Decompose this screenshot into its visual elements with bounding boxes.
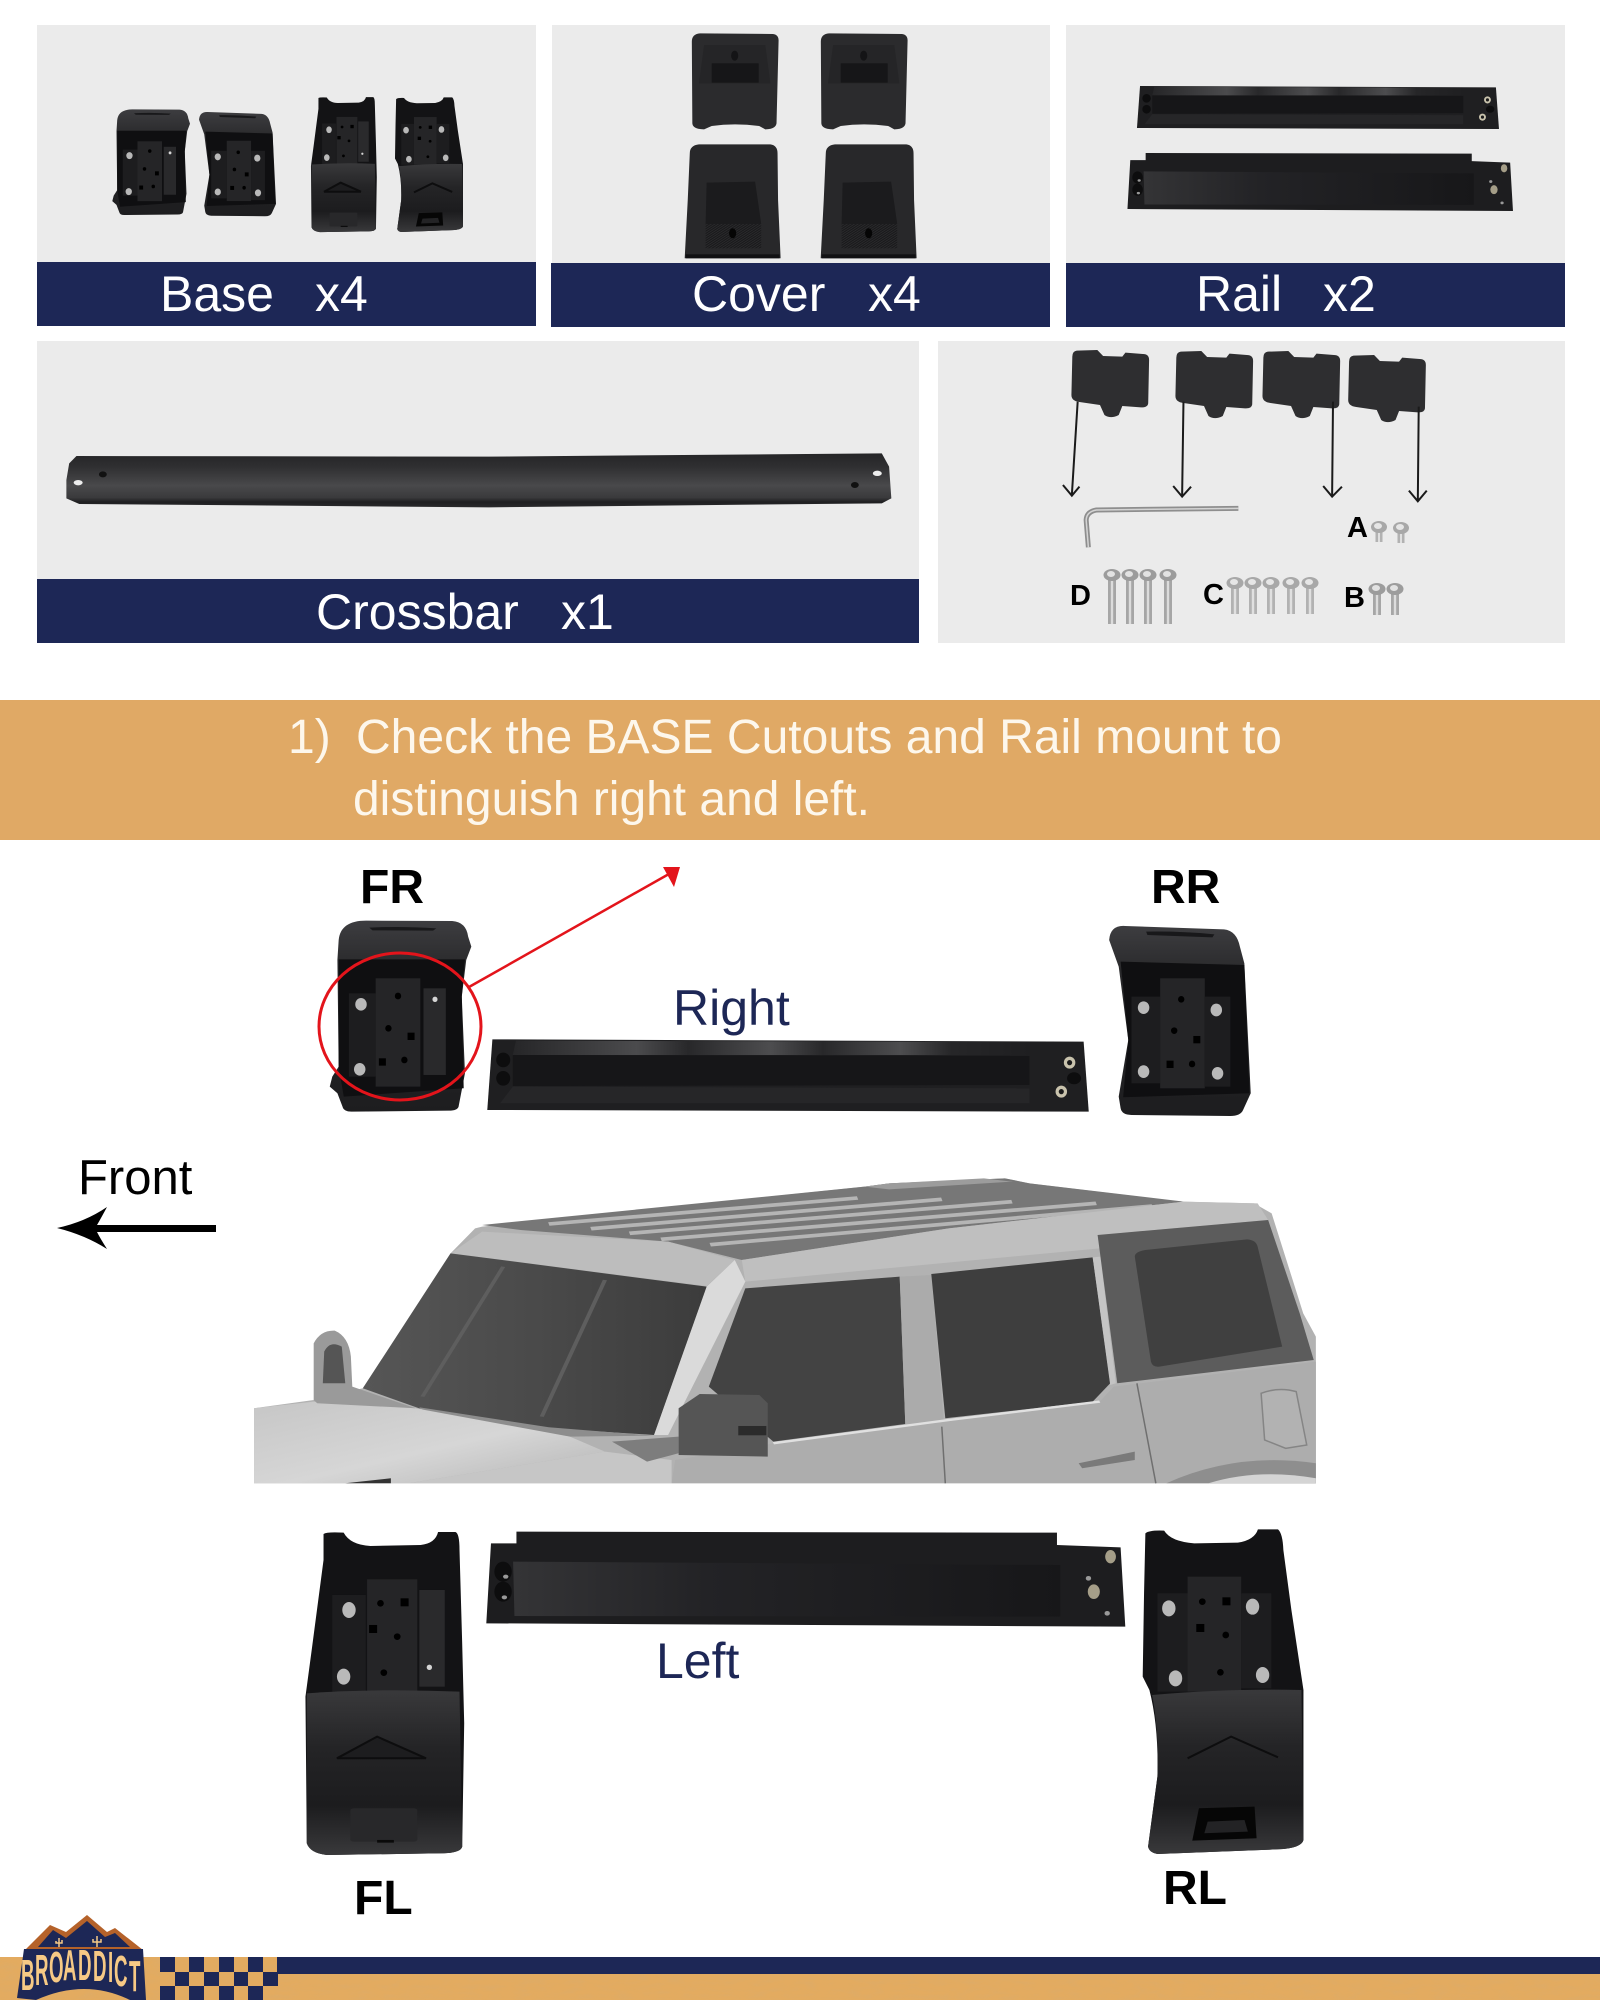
icon: screws D [1104, 569, 1176, 624]
panel: base parts [37, 25, 536, 326]
label bar: rail x2: x2 [1323, 266, 1376, 322]
side mirror [612, 1394, 768, 1462]
label bar: crossbar x1: x1 [561, 584, 614, 640]
icon: cover top right [821, 33, 908, 129]
footer band [0, 1957, 1600, 2000]
icon: base long view 3 [311, 97, 377, 232]
windshield [363, 1253, 707, 1435]
instruction banner [0, 700, 1600, 840]
icon: cover bottom left [685, 144, 781, 258]
icon: front left base [305, 1532, 464, 1855]
label: Right: Right [673, 980, 790, 1036]
label: Left: Left [656, 1633, 740, 1689]
B pillar [900, 1275, 944, 1425]
icon: screws A [1371, 521, 1409, 543]
label: RR: RR [1151, 861, 1220, 914]
icon: crossbar [66, 453, 891, 507]
mirror arm left [314, 1331, 415, 1408]
label bar: base x4: Base [160, 266, 274, 322]
label: FR: FR [360, 861, 424, 914]
label bar: base x4: x4 [315, 266, 368, 322]
panel: crossbar [37, 341, 919, 643]
instruction banner: distinguish right and left. [353, 773, 870, 826]
wheel arch [1166, 1460, 1316, 1483]
label bar: base x4 [37, 262, 536, 326]
instruction banner: Check the BASE Cutouts and Rail mount to [356, 711, 1282, 764]
car image [254, 1178, 1316, 1483]
icon: base top view 2 [199, 112, 276, 216]
label bar: rail x2 [1066, 263, 1565, 327]
callout: red circle on cutout with arrow [319, 867, 680, 1100]
label bar: rail x2: Rail [1196, 266, 1282, 322]
logo: Broaddict [17, 1915, 146, 2000]
label: Front: Front [78, 1151, 193, 1205]
label: C: C [1203, 579, 1224, 611]
label: B: B [1344, 582, 1365, 614]
icon: rear right base [1109, 926, 1251, 1116]
panel: rail parts [1066, 25, 1565, 327]
panel: hardware kit [938, 341, 1565, 643]
checker pattern [160, 1957, 278, 2000]
label: A: A [1347, 512, 1368, 544]
icon: screws B [1368, 583, 1404, 615]
rear door window [931, 1257, 1110, 1418]
icon: screws C [1226, 577, 1318, 614]
icon: base long view 4 [395, 97, 463, 232]
icon: right rail [487, 1039, 1089, 1112]
icon: base top view 1 [112, 109, 190, 215]
label bar: cover x4 [551, 263, 1050, 327]
roof side panel [742, 1202, 1268, 1282]
rear quarter window [1135, 1239, 1282, 1367]
icon: rear left base [1143, 1529, 1303, 1854]
logo: Broaddict: BROADDICT [21, 1941, 141, 2000]
label: D: D [1070, 580, 1091, 612]
door body [672, 1362, 1316, 1483]
label: RL: RL [1163, 1862, 1227, 1915]
rear quarter panel [1098, 1220, 1314, 1383]
icon: cover bottom right [821, 144, 917, 258]
label: FL: FL [354, 1872, 413, 1925]
icon: cover top left [692, 33, 779, 129]
label bar: cover x4: x4 [868, 266, 921, 322]
label bar: cover x4: Cover [692, 266, 825, 322]
icon: front right base [330, 921, 471, 1112]
front door window [709, 1277, 905, 1442]
arrow: front direction [57, 1207, 216, 1249]
icon: left rail [486, 1532, 1125, 1627]
label bar: crossbar x1 [37, 579, 919, 643]
icon: rubber caps with arrows [1063, 350, 1427, 501]
instruction banner: 1) [288, 711, 331, 764]
roof panel [482, 1178, 1184, 1260]
windshield header [451, 1232, 735, 1286]
panel: cover parts [551, 25, 1050, 327]
icon: rail upper [1137, 86, 1499, 129]
label bar: crossbar x1: Crossbar [316, 584, 519, 640]
icon: hex wrench [1086, 508, 1238, 547]
icon: rail lower [1127, 153, 1513, 211]
hood [254, 1402, 605, 1483]
A pillar [654, 1260, 745, 1435]
